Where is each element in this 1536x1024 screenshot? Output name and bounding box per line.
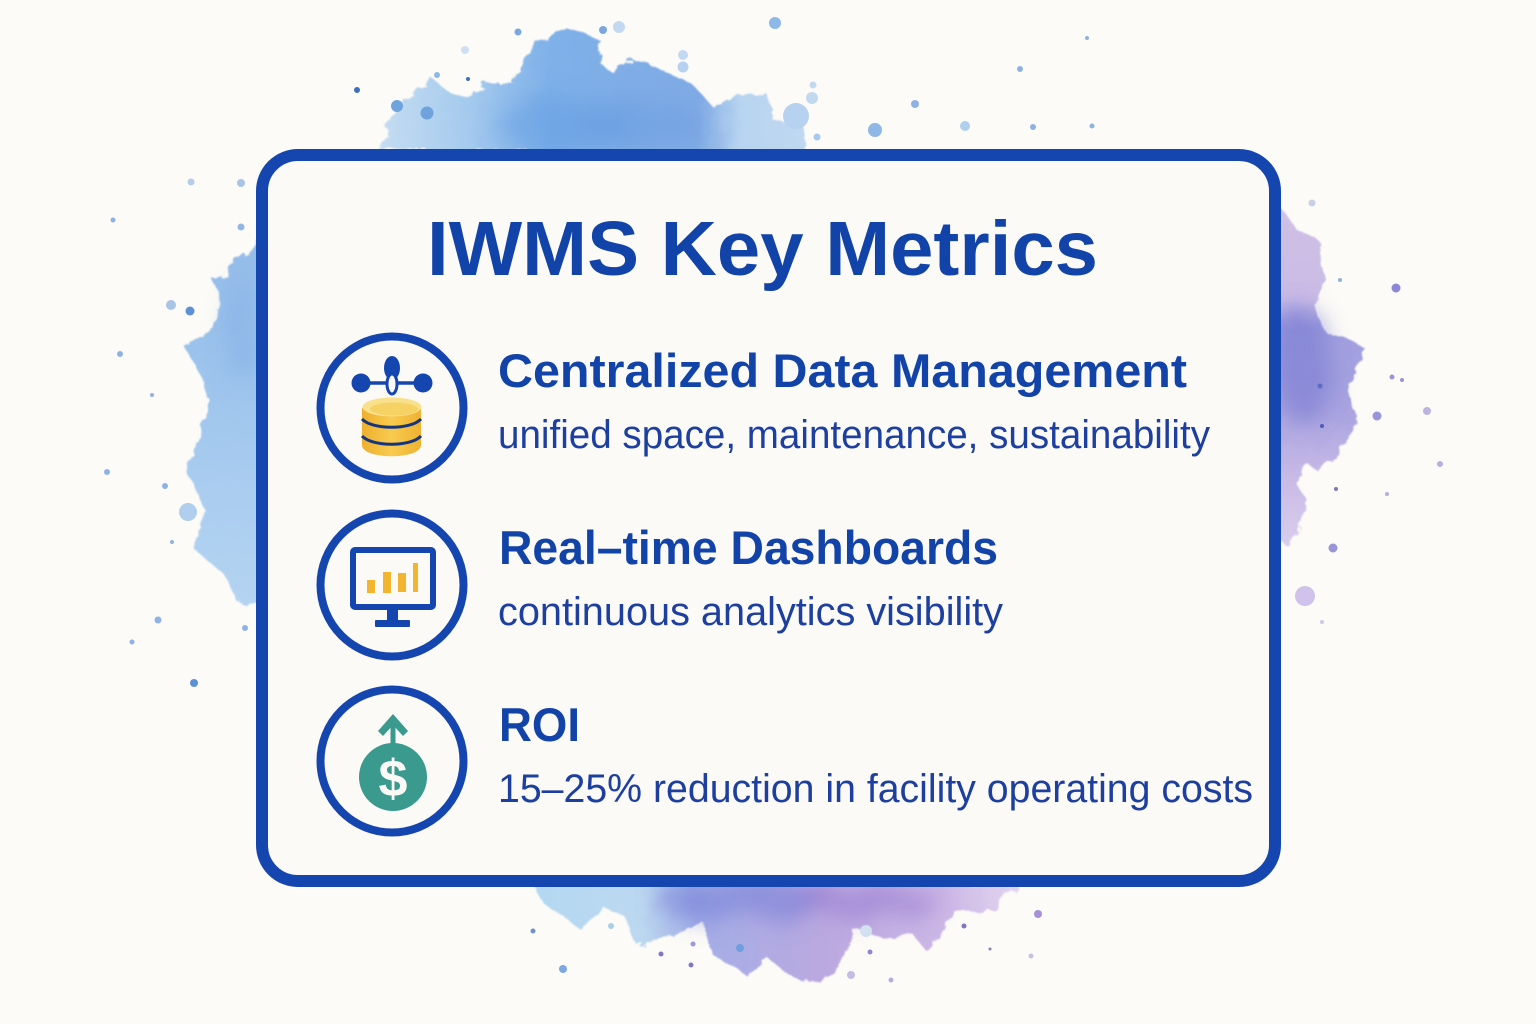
description: continuous analytics visibility bbox=[498, 590, 1003, 634]
metric: ROI bbox=[320, 690, 1253, 832]
heading: Centralized Data Management bbox=[498, 344, 1187, 397]
description: 15–25% reduction in facility operating costs bbox=[498, 767, 1253, 811]
metric: real-time dashboards bbox=[320, 514, 1003, 656]
left splatter bbox=[188, 178, 194, 186]
heading: Real–time Dashboards bbox=[499, 521, 998, 574]
main card bbox=[262, 155, 1275, 881]
icon: dollar coin with up arrow: $ bbox=[379, 750, 408, 808]
bottom splatter bbox=[559, 965, 567, 973]
metric: centralized data management bbox=[320, 336, 1210, 480]
icon: database with network nodes bbox=[320, 336, 464, 480]
icon: dollar coin with up arrow bbox=[320, 690, 464, 832]
top splatter bbox=[391, 100, 403, 112]
description: unified space, maintenance, sustainability bbox=[498, 413, 1210, 457]
icon: monitor with bar chart bbox=[320, 514, 464, 656]
right splatter bbox=[1392, 284, 1400, 292]
title: IWMS Key Metrics bbox=[427, 206, 1098, 292]
heading: ROI bbox=[499, 698, 580, 751]
